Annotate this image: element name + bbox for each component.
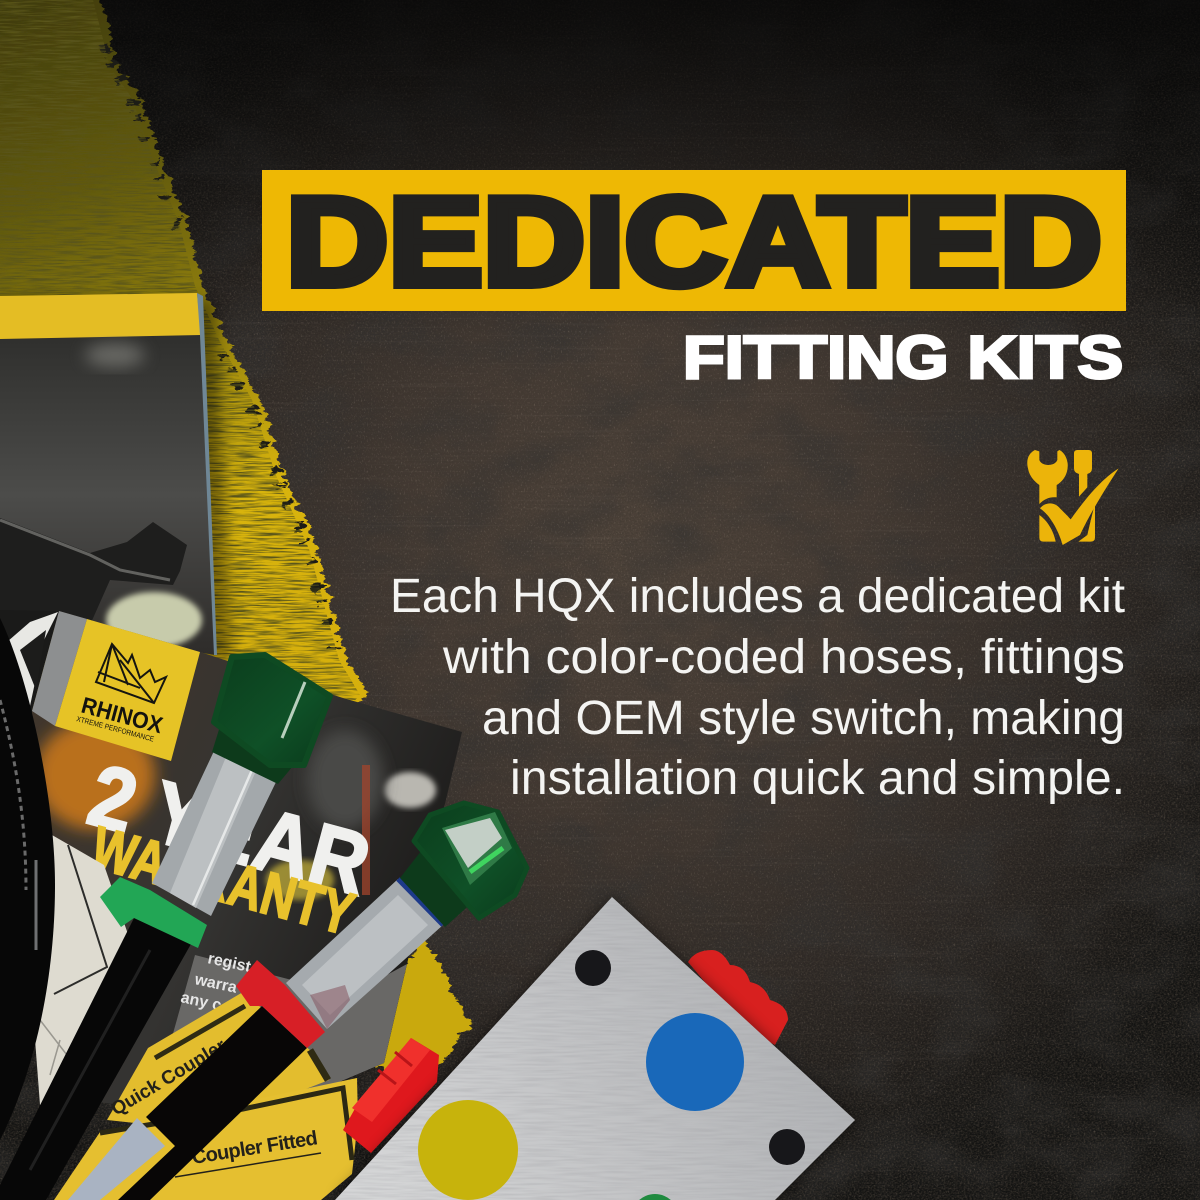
silver ferrule: [286, 879, 443, 1029]
booklet: [0, 293, 232, 660]
black hose body: [118, 1006, 307, 1200]
aluminium valve block: [335, 897, 855, 1200]
warranty small print: any c: [179, 989, 223, 1014]
yellow stroke dry-brush texture: [0, 0, 360, 760]
booklet page edge: [197, 293, 217, 655]
sticker text: Quick Coupler: Quick Coupler: [108, 1035, 230, 1120]
warranty small print: [179, 950, 253, 1014]
icon: wrench, screwdriver and check mark: [1027, 450, 1119, 545]
block brushed texture: [335, 897, 855, 1200]
lower yellow paint brush patch: [370, 935, 470, 1080]
green cap: [214, 655, 330, 765]
booklet shadow: [0, 300, 232, 660]
body text: installation quick and simple.: [510, 752, 1125, 805]
warranty sub headline: WARRANTY: [85, 814, 361, 948]
logo wordmark: RHINOX: [79, 692, 166, 738]
blue ring: [398, 879, 443, 925]
warranty card: [30, 611, 462, 1120]
hose 1 with green fitting: [0, 655, 330, 1200]
yellow dot: [418, 1100, 518, 1200]
green cap: [414, 803, 527, 918]
body text: and OEM style switch, making: [482, 692, 1125, 745]
yellow rhinox logo label: [32, 611, 200, 761]
woven hose sleeve: [68, 1118, 165, 1200]
warranty small print: regist: [206, 950, 253, 976]
white instruction paper: [32, 835, 130, 1105]
hose 2 with green fitting: [68, 803, 527, 1200]
blue dot: [646, 1013, 744, 1111]
logo tagline: XTREME PERFORMANCE: [75, 714, 155, 744]
yellow warning stickers: [54, 992, 358, 1200]
bolt hole right: [769, 1129, 805, 1165]
body text: Each HQX includes a dedicated kit: [390, 570, 1125, 623]
title banner: DEDICATED: DEDICATED: [286, 171, 1102, 312]
green dot: [631, 1194, 679, 1200]
body text: with color-coded hoses, fittings: [442, 631, 1125, 684]
subtitle: FITTING KITS: FITTING KITS: [683, 324, 1123, 391]
red cable tie: [236, 960, 325, 1048]
sticker text: Coupler Fitted: Coupler Fitted: [190, 1127, 319, 1169]
red plug knob behind block: [688, 950, 788, 1045]
green collar: [212, 720, 298, 784]
warranty card photo: [30, 611, 462, 1120]
upper yellow sticker: [107, 992, 329, 1130]
coiled black hose at left: [0, 618, 55, 1140]
black hose body: [0, 918, 191, 1200]
green cable tie: [100, 877, 207, 948]
bolt hole top: [575, 950, 611, 986]
booklet cover photo: [0, 335, 216, 655]
cap glare: [442, 812, 512, 885]
green collar: [400, 846, 475, 927]
booklet photo details: [0, 343, 202, 648]
block face: [335, 897, 855, 1200]
block shadow: [335, 897, 855, 1200]
body text: [390, 570, 1125, 805]
photo strip behind logo: [32, 611, 87, 726]
yellow paint brush stroke: [0, 0, 368, 760]
booklet yellow header strip: [0, 293, 201, 339]
lower yellow sticker: [54, 1078, 358, 1200]
chevron graphic on white booklet: [0, 612, 58, 706]
dark backing behind chevron: [0, 610, 59, 840]
rhino head logo: [96, 644, 166, 703]
silver ferrule: [152, 751, 277, 916]
red plug knob: [343, 1038, 439, 1153]
label square: [55, 619, 200, 761]
warranty small print: warra: [192, 971, 239, 997]
warranty headline: 2 YEAR: [79, 745, 380, 914]
